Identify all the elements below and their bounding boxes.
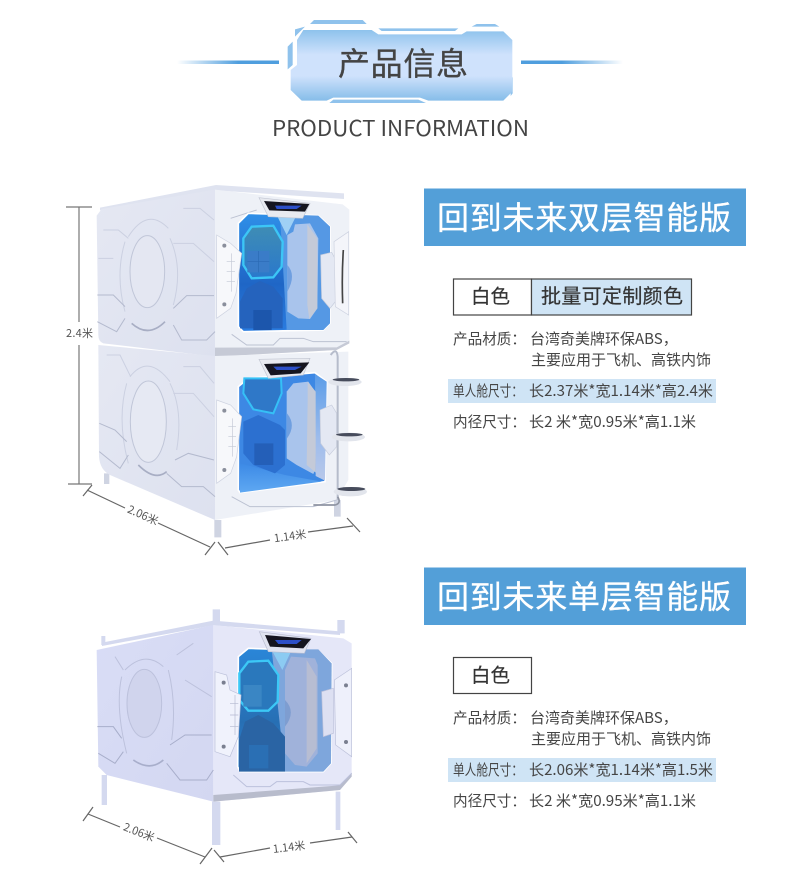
inner size row: 内径尺寸： xyxy=(453,790,526,811)
inner size row xyxy=(453,411,696,432)
colour tag white: 白色 xyxy=(471,659,510,688)
door interior xyxy=(238,373,327,493)
material text: 产品材质： xyxy=(453,328,526,349)
cabin size row xyxy=(448,379,716,403)
decorative line right xyxy=(521,60,623,64)
cabin size row xyxy=(448,758,716,782)
door frame and handles xyxy=(217,198,349,318)
cabin size row: 单人舱尺寸： xyxy=(453,380,523,401)
colour tag white xyxy=(454,279,532,315)
shell xyxy=(97,609,352,845)
decorative line left xyxy=(177,60,279,64)
length dimension 2.06米: 2.06米 xyxy=(125,501,161,529)
inner size row: 内径尺寸： xyxy=(453,411,526,432)
door interior xyxy=(238,213,330,332)
door frame and handles xyxy=(215,632,352,757)
title badge xyxy=(288,20,513,103)
subtitle: PRODUCT INFORMATION xyxy=(272,112,529,143)
material text: 主要应用于飞机、高铁内饰 xyxy=(531,728,711,749)
material text xyxy=(453,707,711,749)
lower capsule xyxy=(98,345,367,537)
colour tag custom: 批量可定制颜色 xyxy=(541,280,683,309)
capsule illustration: double layer xyxy=(66,185,367,555)
shell xyxy=(97,185,349,357)
door frame and handles xyxy=(217,351,367,505)
material text: 主要应用于飞机、高铁内饰 xyxy=(531,349,711,370)
length dimension 2.06米: 2.06米 xyxy=(121,819,157,845)
panel: single layer specs xyxy=(424,568,746,811)
section header: product information xyxy=(177,20,623,143)
width dimension 1.14米 xyxy=(214,832,357,862)
cabin size row: 单人舱尺寸： xyxy=(453,759,523,780)
shell xyxy=(98,345,348,537)
height dimension 2.4米 xyxy=(66,207,93,484)
width dimension 1.14米 xyxy=(218,518,360,555)
cabin size row: 长2.37米*宽1.14米*高2.4米 xyxy=(529,380,713,401)
banner heading: 回到未来双层智能版 xyxy=(437,193,731,239)
inner size row xyxy=(453,790,696,811)
colour tag white xyxy=(454,658,532,694)
cabin size row: 长2.06米*宽1.14米*高1.5米 xyxy=(529,759,713,780)
width dimension 1.14米: 1.14米 xyxy=(272,837,306,857)
inner size row: 长2 米*宽0.95米*高1.1米 xyxy=(529,411,696,432)
door interior xyxy=(238,648,332,772)
inner size row: 长2 米*宽0.95米*高1.1米 xyxy=(529,790,696,811)
length dimension 2.06米 xyxy=(83,485,215,555)
step 1 xyxy=(328,378,362,386)
step 3 xyxy=(334,487,367,496)
title text: 产品信息 xyxy=(338,39,468,85)
step 2 xyxy=(332,433,365,441)
material text: 台湾奇美牌环保ABS， xyxy=(530,707,678,728)
material text xyxy=(453,328,711,370)
upper capsule xyxy=(97,185,349,357)
length dimension 2.06米 xyxy=(83,807,212,864)
banner heading: 回到未来单层智能版 xyxy=(437,572,731,618)
panel: double layer specs xyxy=(424,188,746,432)
capsule illustration: single layer xyxy=(83,609,357,864)
material text: 台湾奇美牌环保ABS， xyxy=(530,328,678,349)
colour tag white: 白色 xyxy=(471,280,510,309)
height dimension 2.4米: 2.4米 xyxy=(66,325,93,341)
material text: 产品材质： xyxy=(453,707,526,728)
width dimension 1.14米: 1.14米 xyxy=(273,526,307,546)
